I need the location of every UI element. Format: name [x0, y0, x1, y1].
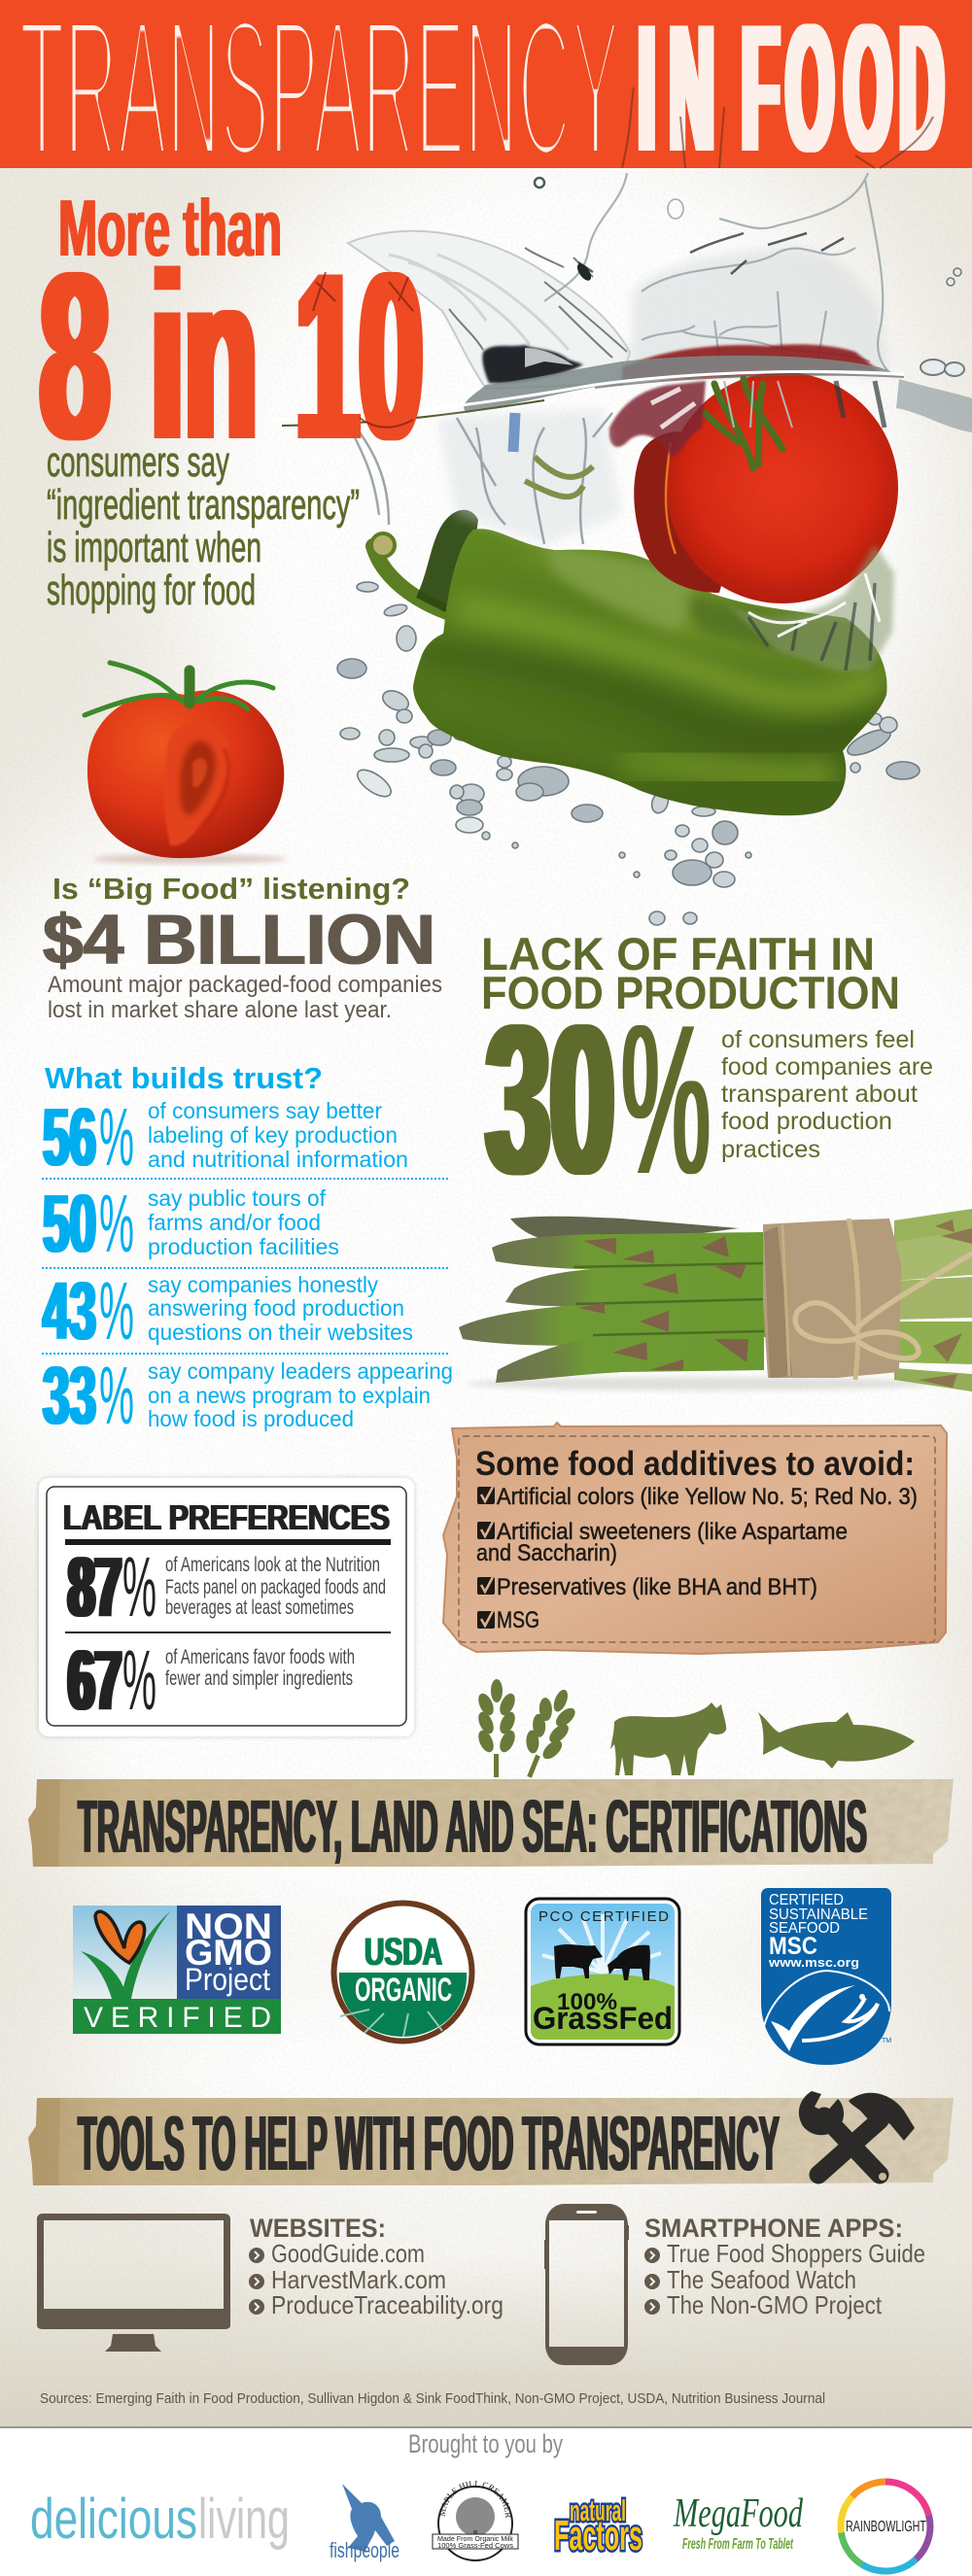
additive items: Artificial sweeteners (like Aspartame [497, 1519, 848, 1545]
pepper stem [373, 546, 447, 612]
icon: wrench and hammer [799, 2091, 915, 2181]
smartphone apps list: The Seafood Watch [667, 2265, 856, 2294]
stat 50: % [99, 1178, 134, 1269]
intro text: consumers say [47, 438, 229, 486]
additive items: Artificial colors (like Yellow No. 5; Red No. 3) [497, 1484, 918, 1510]
stat 43: questions on their websites [148, 1320, 413, 1345]
stat 56: % [99, 1091, 134, 1183]
stat 56: and nutritional information [148, 1147, 408, 1172]
logo: usda organic [334, 1903, 472, 2041]
tomato stem [705, 379, 782, 468]
logo: msc certified sustainable seafood [761, 1888, 891, 2065]
additive items: Preservatives (like BHA and BHT) [497, 1574, 817, 1600]
icon: fish [758, 1712, 915, 1769]
logo: rainbow light: RAINBOWLIGHT [846, 2519, 926, 2535]
panel: label preferences [39, 1478, 414, 1736]
stat 67 [68, 1633, 355, 1728]
websites list: ProduceTraceability.org [271, 2290, 503, 2319]
photo: asparagus bundle [459, 1209, 972, 1391]
stat 33: 33 [43, 1350, 96, 1441]
logo: rainbow light [841, 2482, 930, 2571]
stat 43 [43, 1265, 413, 1357]
stat 43: % [99, 1265, 134, 1357]
logo: msc certified sustainable seafood: MSC [769, 1933, 817, 1960]
additive items: MSG [497, 1607, 539, 1633]
logo: non-gmo project verified: GMO [185, 1933, 272, 1973]
lack of faith block: food companies are [721, 1053, 933, 1081]
footer band [0, 2426, 972, 2576]
logo: msc certified sustainable seafood: www.msc.org [768, 1955, 859, 1970]
intro text: “ingredient transparency” [47, 481, 360, 529]
panel: additives leather tag [443, 1423, 947, 1654]
description: of consumers feel [721, 1026, 915, 1053]
more than: More than [58, 183, 282, 273]
logo: megafood: Fresh From Farm To Tablet [682, 2536, 793, 2553]
stat 87: Facts panel on packaged foods and [165, 1576, 386, 1598]
intro text [47, 438, 360, 614]
heading: SMARTPHONE APPS: [644, 2214, 903, 2243]
icon: tomato with ear [85, 663, 287, 864]
banner: tools [28, 2091, 954, 2186]
stat 33: on a news program to explain [148, 1383, 431, 1408]
stat 56: 56 [43, 1091, 96, 1183]
icon: wheat [475, 1679, 585, 1785]
30 percent: 30 [486, 981, 614, 1219]
sources: Sources: Emerging Faith in Food Production, Sullivan Higdon & Sink FoodThink, Non-GMO Project, USDA, Nutrition Business Journal [40, 2390, 825, 2407]
big food block: lost in market share alone last year. [48, 997, 392, 1023]
big 8 in 10: 8 [40, 223, 110, 489]
logo: natural factors: natural [570, 2493, 626, 2527]
heading: Some food additives to avoid: [475, 1445, 915, 1483]
logo: natural factors [554, 2493, 642, 2559]
lack of faith block: FOOD PRODUCTION [481, 967, 900, 1018]
logo: msc certified sustainable seafood: SEAFOOD [769, 1920, 840, 1937]
heading: WEBSITES: [250, 2214, 386, 2243]
logo: non-gmo project verified: Project [185, 1962, 270, 1997]
logo: maple hill creamery: 100% Grass-Fed Cows [437, 2543, 514, 2550]
underwater splash [350, 408, 622, 544]
logo: fishpeople [330, 2484, 399, 2562]
logo: non-gmo project verified [73, 1906, 281, 2034]
stat 87 [68, 1540, 386, 1634]
additive items: and Saccharin) [476, 1540, 617, 1566]
icon: desktop monitor [37, 2214, 230, 2352]
water surface line [272, 356, 972, 432]
additive items [476, 1484, 918, 1633]
stat 87: % [122, 1540, 156, 1634]
websites list [249, 2214, 503, 2319]
stat 67: % [122, 1633, 156, 1728]
thin splash field [544, 173, 892, 375]
logo: maple hill creamery: MAPLE HILL CREAMERY [439, 2481, 511, 2519]
lack of faith block: food production [721, 1108, 892, 1135]
stat 33: say company leaders appearing [148, 1358, 453, 1384]
stat 50: 50 [43, 1178, 96, 1269]
smartphone apps list: True Food Shoppers Guide [667, 2239, 925, 2268]
photo: splashing tomato and pepper [272, 173, 972, 925]
logo: usda organic: USDA [364, 1931, 442, 1974]
websites list: GoodGuide.com [271, 2239, 425, 2268]
lack of faith block: % [621, 981, 711, 1219]
water dome [348, 231, 630, 389]
stat 56: of consumers say better [148, 1098, 382, 1123]
caption: Amount major packaged-food companies [48, 972, 442, 998]
stat 43: answering food production [148, 1295, 404, 1321]
stat 43: say companies honestly [148, 1272, 378, 1297]
intro text: is important when [47, 524, 261, 571]
pepper [371, 510, 894, 815]
logo: msc certified sustainable seafood: TM [882, 2038, 891, 2044]
heading: LACK OF FAITH IN [481, 928, 875, 979]
mottled reflection [609, 381, 706, 457]
lack of faith block: transparent about [721, 1081, 918, 1108]
stat 67: fewer and simpler ingredients [165, 1667, 353, 1690]
burlap wrap and twine [763, 1219, 972, 1380]
logo: msc certified sustainable seafood: CERTIFIED [769, 1892, 844, 1908]
splash below tomato [724, 544, 894, 670]
stat 50 [43, 1178, 339, 1269]
header band [0, 0, 972, 197]
logo: 100 percent grassfed: GrassFed [533, 2001, 673, 2036]
text: 10 [295, 223, 423, 489]
bubbles [337, 178, 961, 925]
bullets [644, 2248, 660, 2315]
stat 87: 87 [68, 1540, 122, 1634]
stat 43: 43 [43, 1265, 96, 1357]
stat 87: of Americans look at the Nutrition [165, 1554, 380, 1576]
stat 33: % [99, 1350, 134, 1441]
logo: megafood [673, 2491, 804, 2553]
stat 87: beverages at least sometimes [165, 1597, 354, 1619]
spears [510, 1217, 739, 1244]
intro text: shopping for food [47, 567, 256, 614]
big 8 in 10 [40, 223, 423, 489]
logo: natural factors: Factors [554, 2512, 642, 2559]
logo: non-gmo project verified: VERIFIED [84, 2002, 271, 2034]
spear scales [578, 1236, 748, 1370]
logo: fishpeople: fishpeople [330, 2538, 399, 2562]
stat 33: how food is produced [148, 1406, 354, 1431]
icon: cow [610, 1702, 726, 1775]
what builds trust [42, 1061, 453, 1441]
water drips over header [622, 87, 933, 168]
lack of faith block [481, 928, 933, 1219]
right spear ends [894, 1209, 972, 1391]
stat 67: of Americans favor foods with [165, 1646, 355, 1668]
logo: delicious living: delicious [30, 2488, 197, 2551]
cows [554, 1944, 603, 1978]
stat 50: farms and/or food [148, 1210, 321, 1235]
icon: smartphone [544, 2204, 629, 2365]
stat 50: production facilities [148, 1234, 339, 1259]
websites list: HarvestMark.com [271, 2265, 446, 2294]
stat 56 [43, 1091, 408, 1183]
bullets [249, 2248, 264, 2315]
headline: more than 8 in 10 [40, 183, 423, 489]
stat 33 [43, 1350, 453, 1441]
logo: 100 percent grassfed: PCO CERTIFIED [538, 1908, 669, 1925]
logo: megafood: MegaFood [673, 2491, 804, 2536]
logo: 100 percent grassfed [526, 1899, 679, 2044]
smartphone apps list: The Non-GMO Project [667, 2290, 883, 2319]
logo: 100 percent grassfed: 100% [557, 1989, 617, 2015]
big food block [43, 872, 442, 1023]
brought to you by: Brought to you by [408, 2429, 563, 2458]
big 8 in 10: in [151, 223, 258, 489]
check boxes [477, 1487, 495, 1629]
logo: maple hill creamery [432, 2481, 519, 2561]
stat 50: say public tours of [148, 1185, 327, 1211]
stat 56: labeling of key production [148, 1122, 398, 1148]
splash on 10 [313, 272, 413, 428]
smartphone apps list [644, 2214, 925, 2319]
banner: certifications [28, 1779, 954, 1869]
tomato [609, 372, 898, 603]
4 billion: $4 BILLION [43, 901, 435, 979]
lack of faith block: practices [721, 1136, 820, 1163]
logo: msc certified sustainable seafood: SUSTAINABLE [769, 1906, 868, 1923]
logo: maple hill creamery: Made From Organic Milk [437, 2536, 513, 2543]
heading: What builds trust? [45, 1061, 323, 1095]
refracted tomato above waterline [622, 344, 880, 381]
heading: big food: Is “Big Food” listening? [52, 872, 410, 906]
logo: usda organic: ORGANIC [355, 1972, 452, 2009]
logo: delicious living: living [198, 2488, 290, 2551]
heading: LABEL PREFERENCES [63, 1497, 390, 1537]
stat 67: 67 [68, 1633, 122, 1728]
logo: non-gmo project verified: NON [185, 1906, 272, 1946]
